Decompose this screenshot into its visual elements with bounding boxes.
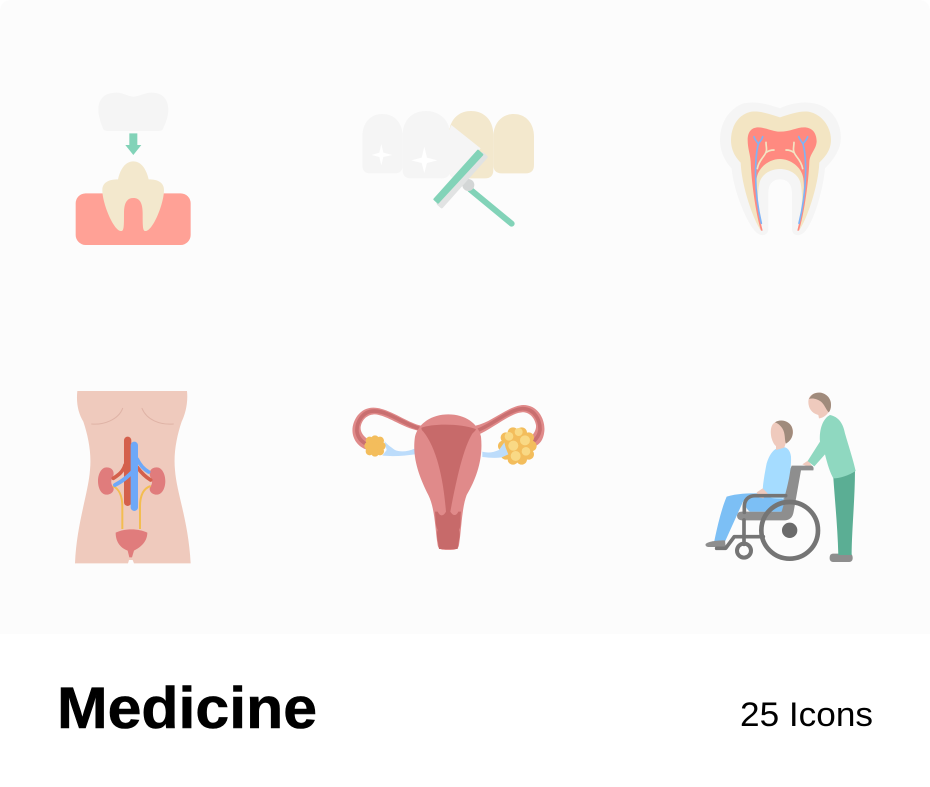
squeegee joint (462, 179, 474, 191)
icon: wheelchair with caregiver (705, 393, 856, 562)
dentin (731, 111, 831, 231)
chair back and seat (737, 466, 814, 520)
ovary left (364, 435, 386, 457)
patient hand (757, 488, 768, 498)
sparkle large (411, 147, 437, 173)
white tooth left (362, 114, 403, 173)
vein (115, 445, 149, 507)
fallopian tube left (352, 408, 421, 450)
torso (75, 391, 191, 563)
icon: urinary system torso (75, 391, 191, 563)
squeegee blade gray (438, 154, 486, 207)
patient hair (775, 421, 793, 444)
uterine cavity (421, 425, 476, 549)
caregiver hair (809, 393, 831, 412)
uterus body (414, 414, 481, 550)
caregiver shoe (830, 554, 853, 562)
beige tooth right (493, 114, 534, 173)
patient torso (763, 447, 791, 499)
white tooth center (403, 111, 450, 178)
patient shoe (705, 540, 726, 547)
tooth outline (720, 103, 841, 235)
sparkle small (372, 144, 392, 165)
ovary right (498, 427, 537, 465)
icon: tooth cross-section (720, 103, 841, 235)
kidney right (150, 467, 165, 495)
caregiver torso (808, 415, 856, 478)
icon count: 25 Icons (740, 696, 873, 734)
icon: female reproductive system (352, 405, 544, 550)
squeegee handle (470, 189, 512, 224)
pulp (748, 127, 817, 231)
crown (98, 93, 168, 131)
large wheel (761, 502, 818, 559)
arrow down (125, 133, 141, 155)
chest lines (92, 408, 173, 424)
squeegee blade green (434, 151, 482, 203)
small wheel (737, 544, 751, 558)
icon: dental crown on tooth (76, 93, 191, 245)
wheel hub (782, 523, 797, 538)
artery (113, 440, 151, 502)
title: Medicine (57, 676, 317, 741)
beige tooth center (449, 111, 493, 178)
patient head (771, 421, 793, 450)
ureters (113, 486, 151, 529)
wheelchair frame (717, 496, 786, 548)
patient pants (714, 493, 785, 542)
caregiver arm hand (802, 460, 812, 467)
caregiver head (808, 393, 831, 418)
fimbriae right (482, 442, 508, 458)
fimbriae left (382, 441, 415, 456)
caregiver legs (833, 471, 855, 555)
gum (76, 193, 191, 245)
fallopian tube right (476, 405, 544, 447)
icon: teeth whitening squeegee (362, 111, 534, 224)
tooth (102, 161, 164, 231)
cleaned part of tooth (449, 125, 481, 178)
nerves (754, 137, 808, 223)
kidney left (98, 467, 114, 495)
bladder (116, 529, 147, 557)
